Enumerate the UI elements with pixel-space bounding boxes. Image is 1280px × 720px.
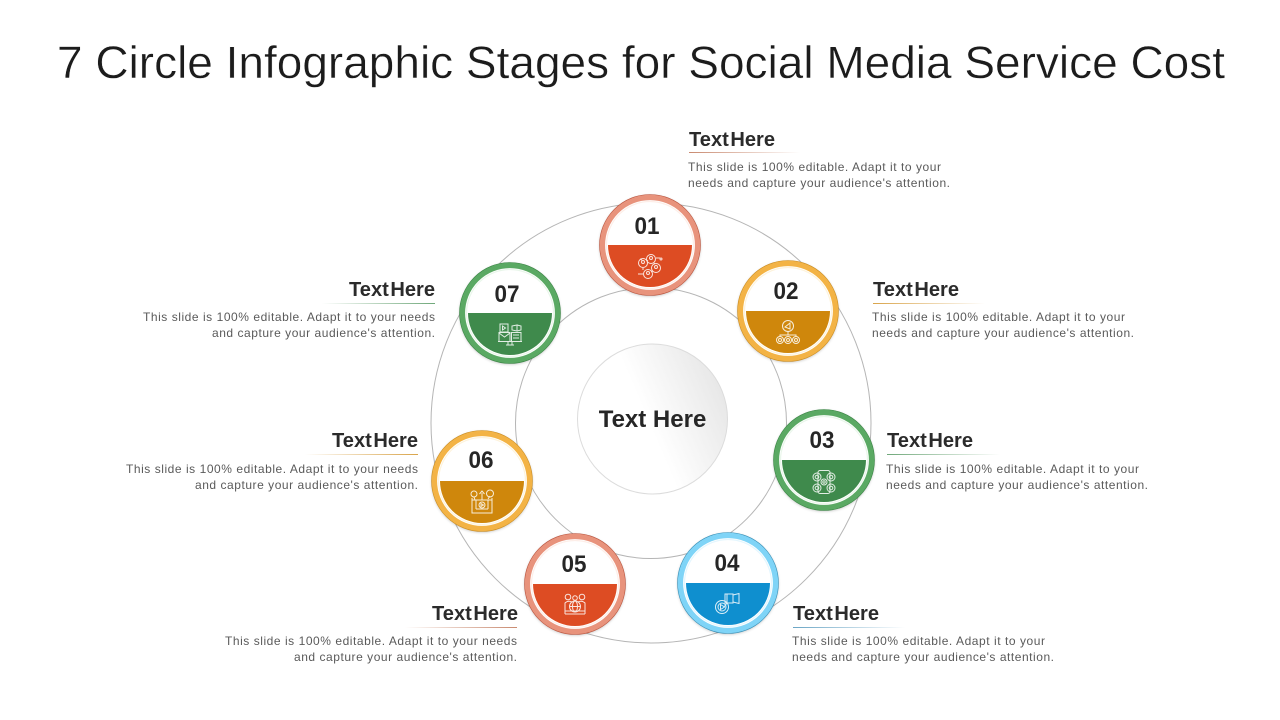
- text block 03: Text Here: [887, 430, 973, 452]
- stage 07: [460, 262, 560, 364]
- centre circle: Text Here: [599, 406, 706, 433]
- text block 01: [688, 129, 950, 190]
- text block 05: This slide is 100% editable. Adapt it to your needs: [225, 634, 517, 648]
- stage 04: 04: [714, 550, 740, 577]
- text block 07: [143, 279, 435, 340]
- text block 01: needs and capture your audience's attention.: [688, 176, 950, 190]
- icon: box with social symbols: [471, 490, 494, 513]
- stage 03: [774, 410, 874, 510]
- stage 05: [524, 534, 626, 634]
- text block 07: This slide is 100% editable. Adapt it to your needs: [143, 310, 435, 324]
- text block 06: Text Here: [332, 430, 418, 452]
- text block 06: and capture your audience's attention.: [195, 478, 418, 492]
- text block 07: and capture your audience's attention.: [212, 326, 435, 340]
- icon: monitor with media windows: [498, 324, 522, 345]
- outer ring: [431, 203, 871, 643]
- stage 06: 06: [468, 447, 494, 474]
- text block 01: This slide is 100% editable. Adapt it to your: [688, 160, 941, 174]
- stage 04: [678, 532, 778, 634]
- stage 02: 02: [774, 278, 798, 305]
- text block 03: This slide is 100% editable. Adapt it to your: [886, 462, 1139, 476]
- text block 02: [872, 279, 1134, 340]
- text block 05: Text Here: [432, 603, 518, 625]
- text block 03: [886, 430, 1148, 492]
- text block 02: Text Here: [873, 279, 959, 301]
- text block 04: needs and capture your audience's attention.: [792, 650, 1054, 664]
- text block 04: Text Here: [793, 603, 879, 625]
- stage 01: 01: [634, 213, 660, 240]
- stage 07: 07: [494, 281, 520, 308]
- text block 02: This slide is 100% editable. Adapt it to your: [872, 310, 1125, 324]
- icon: phone with social bubbles: [813, 470, 835, 494]
- text block 06: This slide is 100% editable. Adapt it to your needs: [126, 462, 418, 476]
- text block 01: Text Here: [689, 129, 775, 151]
- text block 05: [225, 603, 518, 664]
- text block 04: This slide is 100% editable. Adapt it to your: [792, 634, 1045, 648]
- icon: megaphone hierarchy: [776, 320, 800, 344]
- title: 7 Circle Infographic Stages for Social Media Service Cost: [57, 37, 1225, 88]
- stage 02: [738, 260, 838, 362]
- stage 06: [432, 430, 532, 532]
- icon: group with globe: [565, 594, 585, 614]
- stage 05: 05: [562, 551, 586, 578]
- icon: network of people: [638, 254, 662, 278]
- text block 05: and capture your audience's attention.: [294, 650, 517, 664]
- text block 02: needs and capture your audience's attention.: [872, 326, 1134, 340]
- text block 07: Text Here: [349, 279, 435, 301]
- text block 03: needs and capture your audience's attention.: [886, 478, 1148, 492]
- centre circle: [578, 344, 728, 494]
- stage 01: [600, 194, 700, 296]
- text block 04: [792, 603, 1054, 664]
- text block 06: [126, 430, 418, 492]
- inner ring: [516, 288, 786, 558]
- stage 03: 03: [810, 427, 834, 454]
- icon: megaphone and play badge: [716, 594, 739, 614]
